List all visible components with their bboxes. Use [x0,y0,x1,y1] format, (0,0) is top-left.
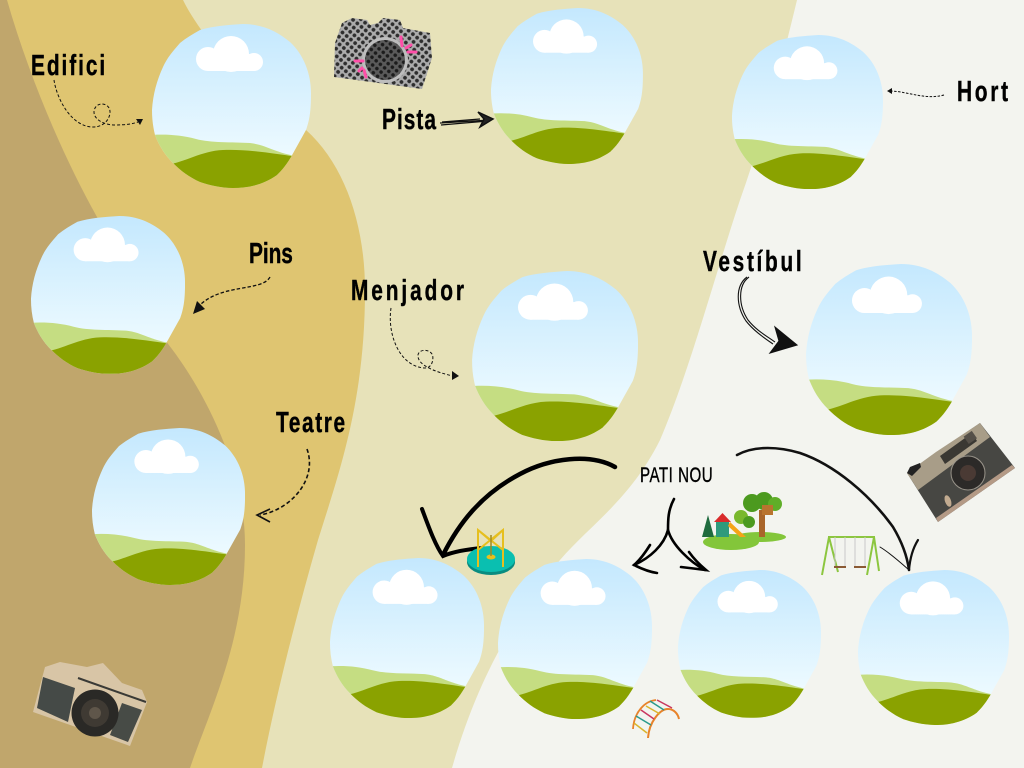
picture: Teatre [91,428,245,585]
label: Menjador: Menjador [351,275,464,307]
arrow: Edifici [54,80,143,127]
picture: Vestibul [805,264,972,435]
picture: Pati nou 1 [329,558,484,718]
camera: bottom left [33,662,147,746]
label: Edifici: Edifici [31,50,105,82]
arrow: Hort [887,88,944,97]
label: Vestibul: Vestíbul [703,246,802,278]
background: golden band [0,0,365,768]
label: Teatre: Teatre [276,407,345,439]
arrow: Pati nou fork [634,499,706,573]
picture: Edifici [151,24,311,188]
picture: Pati nou 4 [857,570,1009,725]
arrow: Menjador [390,308,459,380]
arrow: Pati nou to picture 4 [737,448,918,570]
label: Hort: Hort [957,76,1009,108]
picture: Pati nou 3 [677,570,821,718]
picture: Menjador [471,271,638,441]
arrow: Teatre [257,449,309,522]
label: Pati nou: PATI NOU [640,462,713,487]
arrow: Pista [440,112,493,127]
background: tan band [0,0,245,768]
picture: Hort [731,35,883,189]
background: pale yellow band [0,0,797,768]
picture: Pati nou 2 [497,559,652,719]
label: Pista: Pista [382,104,437,136]
icon: playground [702,492,786,550]
icon: climbing arch [633,700,679,738]
camera: halftone [334,18,432,89]
arrow: Vestibul [738,277,797,353]
arrow: Pins [193,277,270,314]
picture: Pista [490,8,643,164]
icon: carousel [467,530,515,575]
label: Pins: Pins [249,238,293,270]
camera: right [907,423,1015,522]
icon: swing [822,537,879,575]
picture: Pins [30,216,185,374]
arrow: Pati nou to picture 1 [422,459,615,556]
